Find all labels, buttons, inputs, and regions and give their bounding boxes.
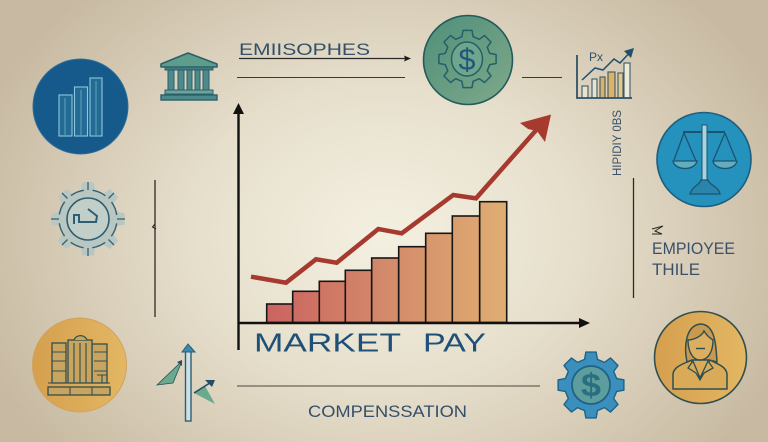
icon: blue circle with scales <box>657 112 751 206</box>
text: rotated vertical label: HIPIDIY 0BS <box>612 110 624 176</box>
icon: green circle with dollar gear <box>424 16 512 104</box>
icon: bank building <box>161 53 217 100</box>
heading: emiisophes label: EMIISOPHES <box>239 40 370 59</box>
chart title <box>254 330 486 358</box>
icon: gold circle with building <box>32 318 126 412</box>
trend arrow <box>251 114 551 283</box>
icon: grey gear with mini chart <box>51 182 125 256</box>
vertical divider left <box>152 180 156 317</box>
icon: small pen mark <box>652 226 663 234</box>
icon: green circle with dollar gear: $ <box>458 42 476 77</box>
icon: blue circle with bars <box>33 59 128 154</box>
y axis <box>233 103 244 350</box>
x axis <box>238 318 590 328</box>
icon: small growth chart: Px <box>589 50 603 64</box>
divider line upper <box>237 76 405 78</box>
chart: market pay bars and trend <box>233 103 590 358</box>
text: employee label: EMPIOYEE <box>652 239 735 258</box>
chart title: MARKET <box>254 330 401 358</box>
text: compensation label: COMPENSSATION <box>308 402 467 421</box>
icon: arrows signpost <box>157 344 215 421</box>
divider line to chart icon <box>522 76 562 78</box>
bars <box>267 202 507 322</box>
text: employee label: THILE <box>652 260 700 279</box>
bottom divider line <box>237 385 540 387</box>
text: employee label <box>652 239 735 279</box>
icon: gold circle with employee <box>654 312 746 404</box>
arrow: top connector to gear <box>239 56 411 62</box>
vertical divider right <box>632 178 634 298</box>
icon: blue dollar gear: $ <box>581 367 601 403</box>
icon: small growth chart <box>577 48 634 98</box>
chart title: PAY <box>423 330 486 358</box>
icon: blue dollar gear <box>558 352 624 418</box>
